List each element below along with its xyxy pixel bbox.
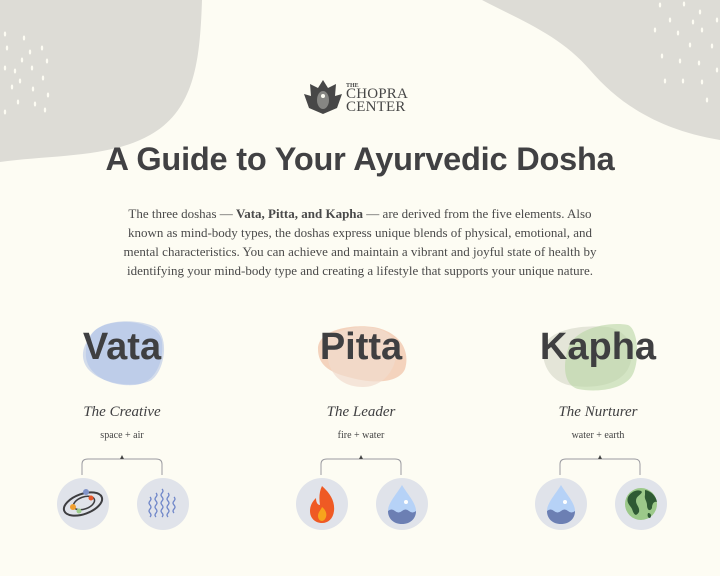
icon: water drop bbox=[535, 478, 587, 530]
logo bbox=[304, 80, 408, 115]
icon: earth bbox=[615, 478, 667, 530]
heading: Kapha: Kapha bbox=[540, 326, 656, 368]
bracket bbox=[560, 455, 640, 475]
title: A Guide to Your Ayurvedic Dosha bbox=[105, 141, 615, 177]
icon: water drop bbox=[376, 478, 428, 530]
blob: kapha bbox=[544, 324, 637, 390]
logo: CHOPRA bbox=[346, 86, 408, 102]
elements text: space + air bbox=[100, 430, 144, 441]
bracket bbox=[82, 455, 162, 475]
elements text: fire + water bbox=[338, 430, 384, 441]
intro paragraph: known as mind-body types, the doshas express unique blends of physical, emotional, and bbox=[128, 225, 592, 240]
subtitle: The Nurturer bbox=[558, 404, 638, 420]
icon: air waves bbox=[137, 478, 189, 530]
elements text: water + earth bbox=[572, 430, 624, 441]
logo: CENTER bbox=[346, 99, 406, 115]
panel: kapha bbox=[535, 324, 667, 530]
subtitle: The Leader bbox=[327, 404, 395, 420]
intro paragraph bbox=[124, 206, 596, 278]
icon: fire bbox=[296, 478, 348, 530]
blob: pitta bbox=[318, 326, 406, 387]
subtitle: The Creative bbox=[83, 404, 161, 420]
heading: Vata: Vata bbox=[83, 326, 161, 368]
intro paragraph: The three doshas — Vata, Pitta, and Kapha — are derived from the five elements. Also bbox=[128, 206, 592, 221]
panel: pitta bbox=[296, 326, 428, 530]
logo: THE bbox=[346, 83, 359, 89]
heading: Pitta: Pitta bbox=[320, 326, 402, 368]
bracket bbox=[320, 455, 402, 475]
blob: vata bbox=[83, 321, 164, 386]
intro paragraph: mental characteristics. You can achieve and maintain a vibrant and joyful state of health by bbox=[124, 244, 596, 259]
panel: vata bbox=[57, 321, 189, 530]
icon: space orbit bbox=[57, 478, 109, 530]
intro paragraph: identifying your mind-body type and creating a lifestyle that supports your unique nature. bbox=[127, 263, 593, 278]
